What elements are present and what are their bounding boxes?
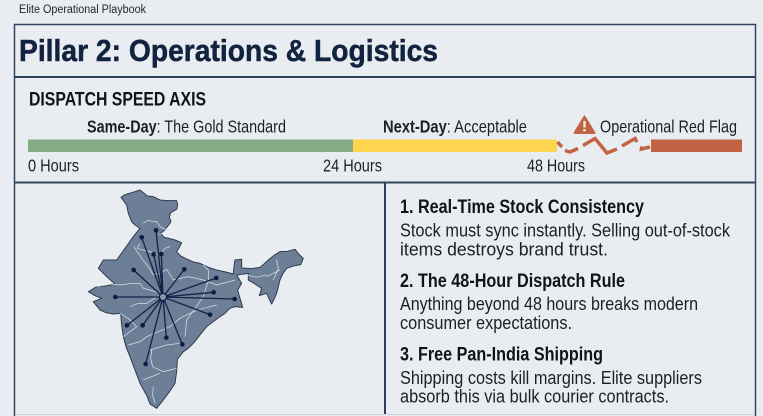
tick: 24 hours: 24 Hours: [323, 156, 382, 176]
title: Pillar 2: Operations & Logistics: [19, 33, 438, 68]
network nodes: [113, 228, 237, 366]
panel: dispatch speed axis: [28, 88, 742, 176]
label: same-day: Same-Day: The Gold Standard: [87, 116, 286, 136]
bar: red segment: [651, 140, 742, 152]
map: India distribution network: [88, 190, 303, 408]
rule 1 body: Stock must sync instantly. Selling out-of-stock: [400, 220, 731, 240]
header label: Elite Operational Playbook: [19, 4, 146, 16]
rule 1 heading: 1. Real-Time Stock Consistency: [400, 196, 644, 218]
rule 2 heading: 2. The 48-Hour Dispatch Rule: [400, 270, 625, 292]
rule 3 body: Shipping costs kill margins. Elite suppliers: [400, 367, 702, 388]
axis heading: DISPATCH SPEED AXIS: [29, 88, 206, 110]
bar: green segment: [28, 140, 353, 152]
central hub: [159, 293, 167, 301]
network spokes: [115, 230, 235, 364]
bar: broken zigzag: [558, 138, 650, 153]
rule 1 body: items destroys brand trust.: [400, 238, 608, 260]
rule 2 body: consumer expectations.: [400, 312, 572, 333]
icon: warning triangle: [574, 116, 594, 133]
rule 3 body: absorb this via bulk courier contracts.: [400, 386, 669, 406]
panel: key rules: [400, 196, 731, 406]
map outline: [88, 190, 303, 408]
rule 3 heading: 3. Free Pan-India Shipping: [400, 344, 603, 366]
label: next-day: Next-Day: Acceptable: [383, 116, 527, 136]
tick: 0 hours: 0 Hours: [28, 156, 79, 176]
label: red flag: Operational Red Flag: [600, 116, 737, 136]
rule 2 body: Anything beyond 48 hours breaks modern: [400, 293, 698, 314]
bar: yellow segment: [353, 140, 557, 152]
state borders: [97, 221, 280, 403]
tick: 48 hours: 48 Hours: [527, 156, 585, 176]
